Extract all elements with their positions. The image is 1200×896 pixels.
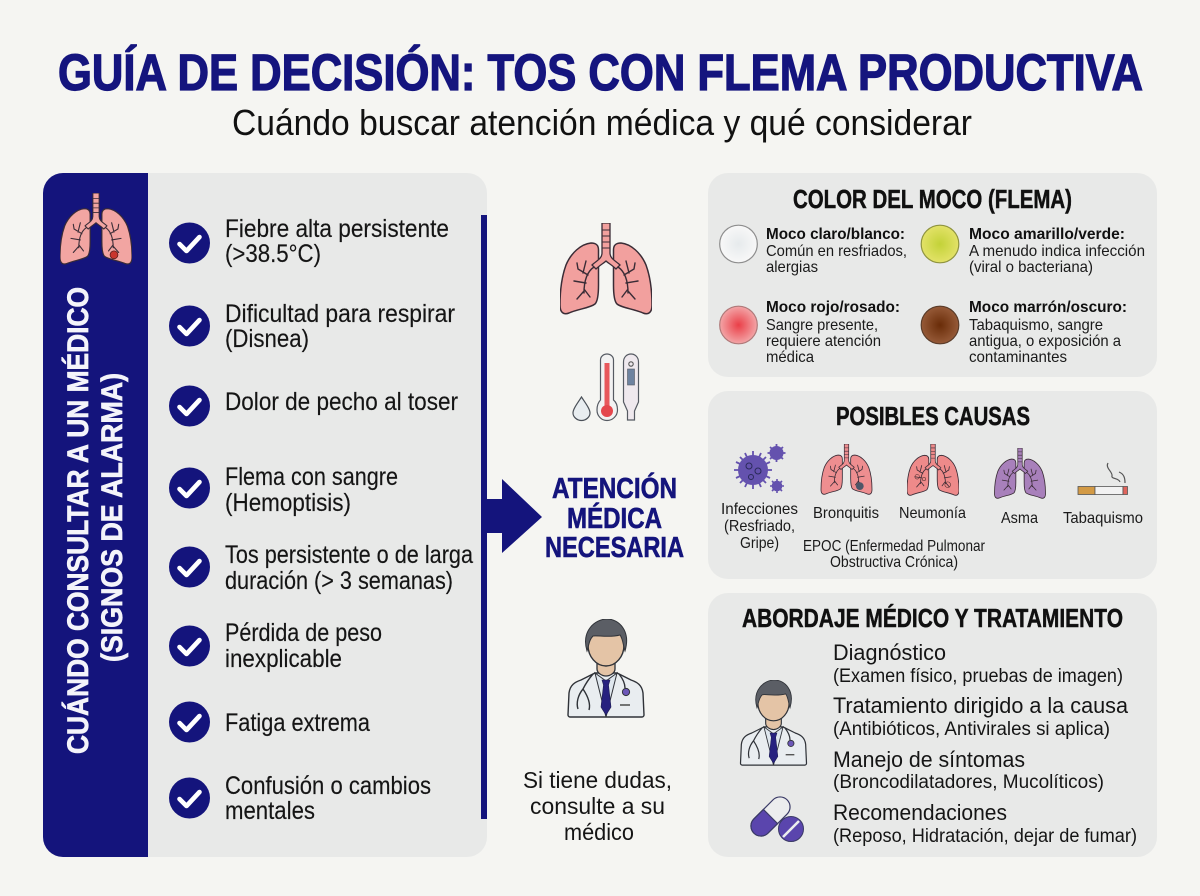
text: amarillo bbox=[969, 226, 1145, 276]
item: fatiga bbox=[169, 702, 370, 742]
swatch: marrón bbox=[921, 306, 959, 344]
text: claro bbox=[766, 226, 907, 276]
item: flema con sangre: Flema con sangre bbox=[225, 463, 398, 491]
text: marrón: Tabaquismo, sangre bbox=[969, 317, 1103, 334]
text: claro: Común en resfriados, bbox=[766, 243, 907, 260]
item: pérdida de peso: inexplicable bbox=[225, 645, 342, 673]
panel: color del moco bbox=[708, 173, 1157, 377]
text: claro: alergias bbox=[766, 259, 818, 276]
callout: atención médica necesaria: ATENCIÓN bbox=[552, 471, 677, 505]
panel: abordaje médico bbox=[708, 593, 1157, 857]
text: tratamiento: (Antibióticos, Antivirales si aplica) bbox=[833, 719, 1110, 740]
label: asma: Asma bbox=[1001, 510, 1038, 527]
text: diagnóstico: (Examen físico, pruebas de imagen) bbox=[833, 666, 1123, 687]
item: dolor: Dolor de pecho al toser bbox=[225, 388, 458, 416]
icon: sidebar lungs bbox=[60, 193, 132, 265]
text: marrón: Moco marrón/oscuro: bbox=[969, 299, 1127, 316]
text: recomendaciones: Recomendaciones bbox=[833, 800, 1007, 825]
icon: cigarette bbox=[1078, 463, 1128, 494]
text: marrón: contaminantes bbox=[969, 349, 1067, 366]
label: infecciones: Infecciones bbox=[721, 501, 798, 518]
item: confusión: Confusión o cambios bbox=[225, 772, 431, 800]
text: recomendaciones: (Reposo, Hidratación, dejar de fumar) bbox=[833, 826, 1137, 847]
icon: doctor bbox=[740, 680, 808, 766]
text: diagnóstico bbox=[833, 640, 1123, 687]
label: infecciones bbox=[721, 501, 798, 552]
panel: posibles causas bbox=[708, 391, 1157, 579]
text: recomendaciones bbox=[833, 800, 1137, 847]
callout: atención médica necesaria bbox=[545, 471, 684, 564]
label: epoc: EPOC (Enfermedad Pulmonar bbox=[803, 538, 986, 555]
item: pérdida de peso: Pérdida de peso bbox=[225, 619, 382, 647]
item: confusión bbox=[169, 772, 431, 825]
text: tratamiento bbox=[833, 693, 1129, 740]
arrow: vertical bar and pointer bbox=[481, 215, 542, 819]
icon: bronquitis lungs bbox=[820, 444, 872, 495]
callout: atención médica necesaria: MÉDICA bbox=[567, 501, 662, 535]
icon: pills bbox=[747, 793, 804, 842]
icon: drop and thermometers bbox=[573, 354, 638, 420]
label: tabaquismo: Tabaquismo bbox=[1063, 510, 1143, 527]
swatch: claro bbox=[720, 225, 757, 263]
item: fiebre bbox=[169, 215, 449, 268]
item: disnea: Dificultad para respirar bbox=[225, 300, 455, 328]
item: tos persistente: Tos persistente o de larga bbox=[225, 541, 473, 569]
label: epoc: Obstructiva Crónica) bbox=[830, 554, 958, 571]
item: flema con sangre: (Hemoptisis) bbox=[225, 489, 351, 517]
icon: virus bbox=[734, 444, 786, 493]
callout: atención médica necesaria: NECESARIA bbox=[545, 532, 684, 564]
heading: posibles causas: POSIBLES CAUSAS bbox=[836, 401, 1030, 431]
text: rojo: médica bbox=[766, 349, 814, 366]
label: infecciones: (Resfriado, bbox=[724, 518, 795, 535]
subtitle: Cuándo buscar atención médica y qué considerar bbox=[232, 102, 972, 143]
swatch: rojo bbox=[720, 306, 757, 344]
note: si tiene dudas: Si tiene dudas, bbox=[523, 767, 672, 793]
text: tratamiento: Tratamiento dirigido a la causa bbox=[833, 693, 1129, 718]
item: disnea: (Disnea) bbox=[225, 325, 309, 353]
text: amarillo: Moco amarillo/verde: bbox=[969, 226, 1125, 243]
label: epoc bbox=[803, 538, 986, 571]
text: rojo: requiere atención bbox=[766, 333, 881, 350]
sidebar heading line 1: CUÁNDO CONSULTAR A UN MÉDICO bbox=[61, 287, 95, 754]
item: confusión: mentales bbox=[225, 797, 315, 825]
label: bronquitis: Bronquitis bbox=[813, 505, 879, 522]
item: fiebre: Fiebre alta persistente bbox=[225, 215, 449, 243]
text: rojo: Moco rojo/rosado: bbox=[766, 299, 900, 316]
label: neumonía: Neumonía bbox=[899, 505, 966, 522]
text: rojo: Sangre presente, bbox=[766, 317, 878, 334]
icon: asma lungs bbox=[994, 448, 1046, 499]
text: marrón: antigua, o exposición a bbox=[969, 333, 1121, 350]
item: fatiga: Fatiga extrema bbox=[225, 709, 370, 737]
icon: neumonía lungs bbox=[907, 444, 959, 496]
navy sidebar bbox=[43, 173, 148, 857]
item: fiebre: (>38.5°C) bbox=[225, 240, 321, 268]
note: si tiene dudas: consulte a su bbox=[530, 793, 665, 819]
sidebar heading line 2: (SIGNOS DE ALARMA) bbox=[96, 373, 129, 662]
item: tos persistente: duración (> 3 semanas) bbox=[225, 567, 453, 595]
text: manejo de síntomas: (Broncodilatadores, Mucolíticos) bbox=[833, 772, 1104, 793]
swatch: amarillo bbox=[921, 225, 959, 263]
text: claro: Moco claro/blanco: bbox=[766, 226, 905, 243]
label: infecciones: Gripe) bbox=[740, 535, 779, 552]
note: si tiene dudas: médico bbox=[564, 819, 634, 845]
text: diagnóstico: Diagnóstico bbox=[833, 640, 946, 665]
text: amarillo: A menudo indica infección bbox=[969, 243, 1145, 260]
text: marrón bbox=[969, 299, 1127, 366]
item: disnea bbox=[169, 300, 455, 353]
icon: central lungs bbox=[560, 223, 652, 314]
text: amarillo: (viral o bacteriana) bbox=[969, 259, 1093, 276]
icon: central doctor bbox=[567, 619, 645, 718]
item: pérdida de peso bbox=[169, 619, 382, 673]
item: tos persistente bbox=[169, 541, 473, 595]
heading: color del moco: COLOR DEL MOCO (FLEMA) bbox=[793, 184, 1072, 214]
text: manejo de síntomas bbox=[833, 747, 1104, 793]
item: dolor bbox=[169, 386, 458, 426]
text: rojo bbox=[766, 299, 900, 366]
note: si tiene dudas bbox=[523, 767, 672, 845]
panel: warning signs bbox=[43, 173, 487, 857]
item: flema con sangre bbox=[169, 463, 398, 517]
text: manejo de síntomas: Manejo de síntomas bbox=[833, 747, 1025, 772]
